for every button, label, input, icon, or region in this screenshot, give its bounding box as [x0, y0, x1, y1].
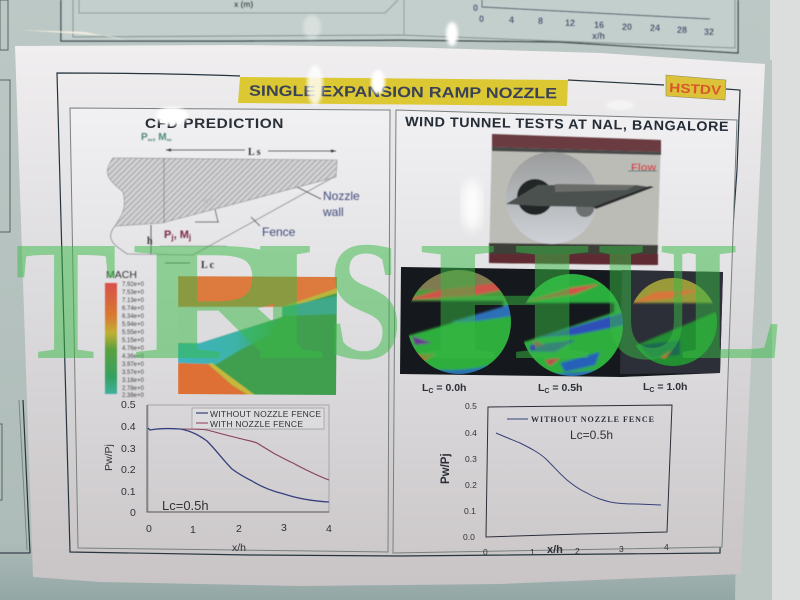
chart: Pw/Pj with and without fence: 4: [326, 523, 332, 535]
chart: Pw/Pj without fence: 2: [575, 546, 580, 556]
Mach legend: 2.38e+0: [122, 393, 145, 399]
chart: Pw/Pj without fence: Lc=0.5h: [570, 428, 613, 442]
glare highlights: [20, 15, 634, 231]
nozzle schematic: P: [141, 132, 148, 143]
upper poster fragment: 16: [594, 20, 604, 30]
upper poster fragment: 12: [565, 18, 575, 28]
panel: wind tunnel tests: [393, 110, 737, 557]
Mach legend: 3.97e+0: [122, 362, 145, 368]
chart: Pw/Pj with and without fence: x/h: [232, 542, 246, 554]
watermark: TRISHUL: S: [327, 206, 403, 395]
schlieren images: [400, 267, 723, 377]
Mach legend: 7.92e+0: [122, 282, 145, 288]
chart: Pw/Pj without fence: 4: [664, 542, 669, 552]
Mach legend: 2.78e+0: [122, 386, 145, 392]
upper poster fragment: 20: [622, 22, 632, 32]
chart: Pw/Pj with and without fence: 0.5: [121, 399, 136, 411]
upper poster fragment: [61, 0, 738, 53]
upper poster fragment: 8: [538, 16, 543, 26]
chart: Pw/Pj without fence: 0.1: [464, 506, 476, 516]
nozzle schematic: , M: [174, 229, 189, 241]
chart: Pw/Pj with and without fence: 3: [281, 522, 287, 534]
chart: Pw/Pj without fence: 0.3: [465, 454, 477, 464]
title banner: [238, 77, 568, 106]
schlieren captions: L: [422, 382, 428, 394]
schlieren captions: = 0.0h: [433, 382, 466, 394]
chart: Pw/Pj without fence: 0.2: [465, 480, 477, 490]
Mach legend: [105, 269, 145, 399]
Mach legend: 3.57e+0: [122, 370, 145, 376]
panel: CFD prediction: [70, 108, 390, 554]
Mach legend: MACH: [106, 269, 137, 281]
chart: Pw/Pj without fence: 0.4: [465, 428, 477, 438]
nozzle schematic: P: [164, 229, 171, 241]
HSTDV badge: [666, 75, 726, 100]
chart: Pw/Pj without fence: 3: [619, 544, 624, 554]
image: Lc = 0.5h: [524, 274, 623, 376]
chart: Pw/Pj without fence: 1: [530, 547, 535, 557]
Mach legend: 6.74e+0: [122, 306, 145, 312]
schlieren captions: L: [538, 382, 544, 394]
watermark: TRISHUL: H: [418, 206, 592, 395]
Mach legend: 5.94e+0: [122, 322, 145, 328]
nozzle schematic: L c: [201, 260, 215, 271]
photo: nozzle model in tunnel: Flow: [631, 162, 656, 174]
watermark: TRISHUL: T: [15, 206, 117, 395]
upper poster fragment: x (m): [234, 0, 253, 9]
Mach legend: 7.53e+0: [122, 290, 145, 296]
photo: nozzle model in tunnel: [489, 134, 661, 265]
nozzle schematic: h: [147, 236, 153, 247]
schlieren captions: = 0.5h: [549, 382, 582, 394]
schlieren captions: [422, 381, 687, 395]
chart: Pw/Pj without fence: WITHOUT NOZZLE FENCE: [531, 415, 654, 424]
chart: Pw/Pj with and without fence: Pw/Pj: [103, 444, 115, 471]
upper poster fragment: 0: [479, 14, 484, 24]
chart: Pw/Pj with and without fence: 0: [130, 507, 136, 519]
chart: Pw/Pj with and without fence: 1: [190, 524, 196, 536]
schlieren captions: C: [428, 388, 433, 395]
watermark: TRISHUL: U: [596, 206, 696, 395]
Mach legend: 5.15e+0: [122, 338, 145, 344]
nozzle schematic: j: [188, 233, 191, 242]
schlieren captions: = 1.0h: [654, 381, 687, 393]
upper poster fragment: x/h: [592, 31, 605, 41]
nozzle schematic: Fence: [262, 225, 296, 239]
chart: Pw/Pj with and without fence: 2: [236, 523, 242, 535]
Mach legend: 4.76e+0: [122, 346, 145, 352]
chart: Pw/Pj without fence: 0.0: [463, 532, 475, 542]
outer frame: [57, 73, 740, 556]
watermark: TRISHUL: I: [255, 206, 315, 395]
nozzle schematic: L s: [248, 147, 261, 158]
Mach legend: 6.34e+0: [122, 314, 145, 320]
nozzle schematic: wall: [322, 205, 344, 219]
watermark: TRISHUL: R: [130, 206, 322, 395]
image: Lc = 1.0h: [633, 278, 717, 366]
nozzle schematic: ∞: [148, 137, 153, 144]
chart: Pw/Pj with and without fence: Lc=0.5h: [162, 498, 209, 513]
watermark: TRISHUL: L: [680, 206, 784, 395]
upper poster fragment: 32: [704, 27, 714, 37]
chart: Pw/Pj without fence: 0: [483, 547, 488, 557]
chart: Pw/Pj with and without fence: 0.2: [121, 464, 136, 476]
chart: Pw/Pj without fence: x/h: [547, 544, 563, 556]
chart: Pw/Pj without fence: [440, 401, 672, 557]
chart: Pw/Pj with and without fence: WITH NOZZLE FENCE: [210, 419, 303, 429]
nozzle schematic: , M: [153, 132, 167, 143]
nozzle schematic: 8°: [203, 198, 214, 210]
chart: Pw/Pj with and without fence: 0: [146, 523, 152, 535]
image: Lc = 0.0h: [408, 270, 511, 374]
schlieren captions: C: [544, 388, 549, 395]
heading: CFD prediction: CFD PREDICTION: [145, 116, 284, 131]
axis fragment: [482, 0, 710, 19]
watermark: TRISHUL: [15, 206, 784, 395]
nozzle schematic: j: [170, 233, 174, 242]
title banner: SINGLE EXPANSION RAMP NOZZLE: [249, 83, 557, 102]
chart: Pw/Pj with and without fence: [103, 399, 332, 554]
chart: Pw/Pj with and without fence: 0.4: [121, 421, 136, 433]
nozzle schematic: Nozzle: [323, 189, 360, 203]
schlieren captions: C: [649, 387, 654, 394]
nozzle schematic: ∞: [167, 137, 172, 144]
Mach legend: 7.13e+0: [122, 298, 145, 304]
nozzle schematic: [107, 132, 360, 271]
chart: Pw/Pj without fence: Pw/Pj: [440, 453, 452, 484]
schlieren captions: L: [643, 381, 649, 393]
HSTDV badge: HSTDV: [669, 80, 722, 98]
upper poster fragment: 4: [509, 15, 514, 25]
chart: Pw/Pj with and without fence: WITHOUT NOZZLE FENCE: [210, 409, 321, 419]
heading: wind tunnel tests: WIND TUNNEL TESTS AT NAL, BANGALORE: [405, 114, 729, 134]
upper poster fragment: 28: [677, 25, 687, 35]
Mach legend: 3.18e+0: [122, 378, 145, 384]
Mach legend: 4.36e+0: [122, 354, 145, 360]
Mach contour plot: [178, 276, 338, 396]
upper poster fragment: 0: [473, 3, 478, 13]
upper poster fragment: 24: [650, 23, 660, 33]
chart: Pw/Pj with and without fence: 0.1: [121, 486, 136, 498]
chart: Pw/Pj with and without fence: 0.3: [121, 443, 136, 455]
Mach legend: 5.55e+0: [122, 330, 145, 336]
chart: Pw/Pj without fence: 0.5: [465, 401, 477, 411]
